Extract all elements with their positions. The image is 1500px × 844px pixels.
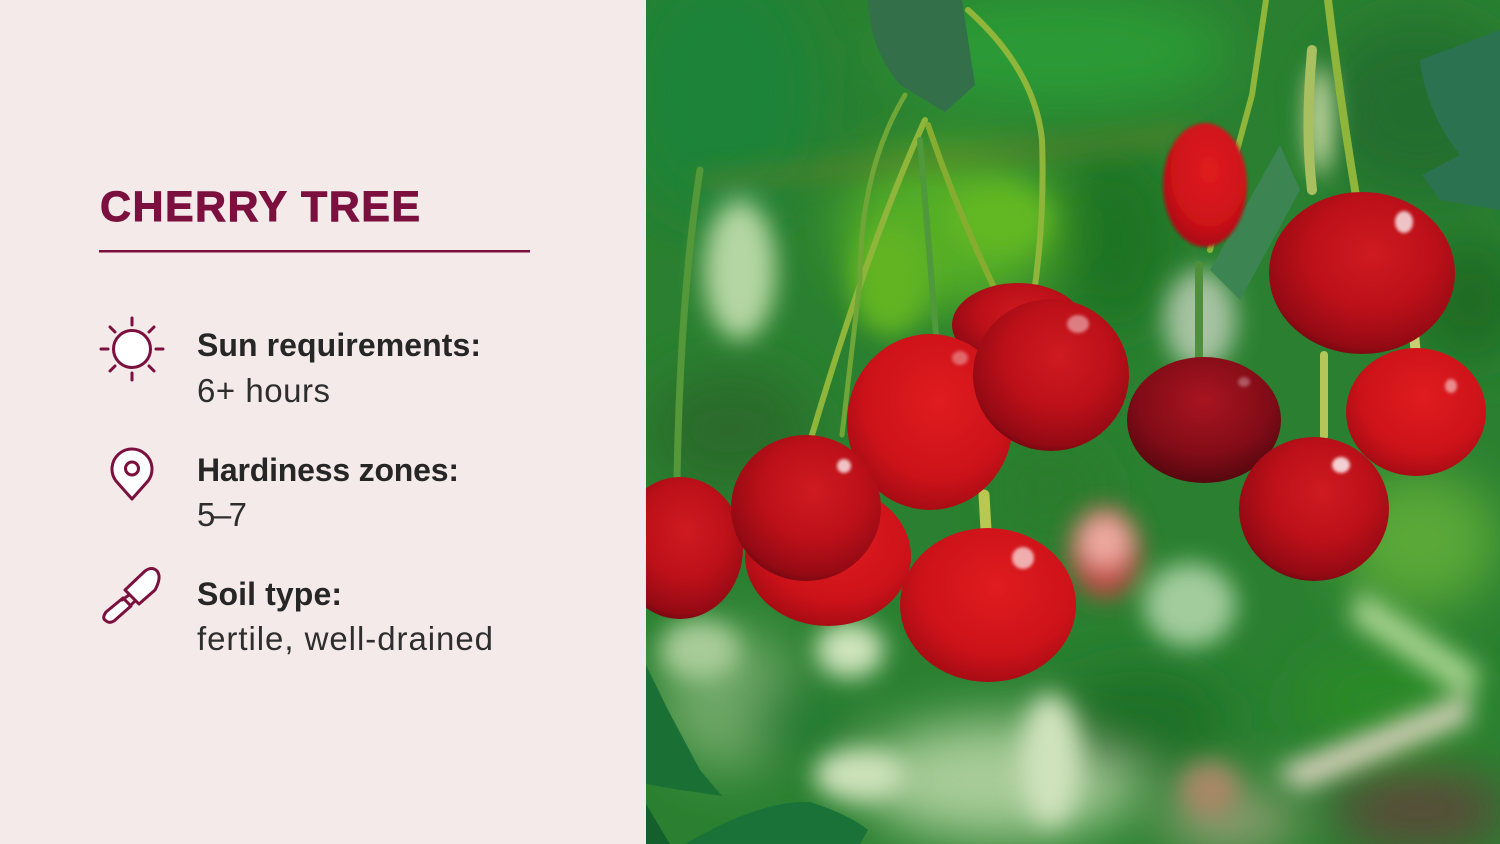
text: hardiness zones: 5–7 [197,496,247,533]
icon: sun [101,318,163,380]
title underline [99,250,530,252]
blurred foliage background [620,0,1500,844]
cherries [617,123,1486,682]
photo: cherries on a branch [617,0,1500,844]
text: sun requirements: 6+ hours [197,372,330,409]
text: hardiness zones [197,452,459,533]
text: hardiness zones: Hardiness zones: [197,452,459,488]
text: soil type: Soil type: [197,576,342,612]
leaves [646,0,1500,844]
title: CHERRY TREE [100,183,420,231]
cherry highlights [837,211,1457,569]
text: sun requirements [197,327,481,409]
text: soil type [197,576,493,657]
text: sun requirements: Sun requirements: [197,327,481,363]
panel: info background [0,0,646,844]
text: soil type: fertile, well-drained [197,620,493,657]
icon: location pin [112,449,152,499]
icon: trowel [104,568,159,622]
stems [677,0,1416,530]
